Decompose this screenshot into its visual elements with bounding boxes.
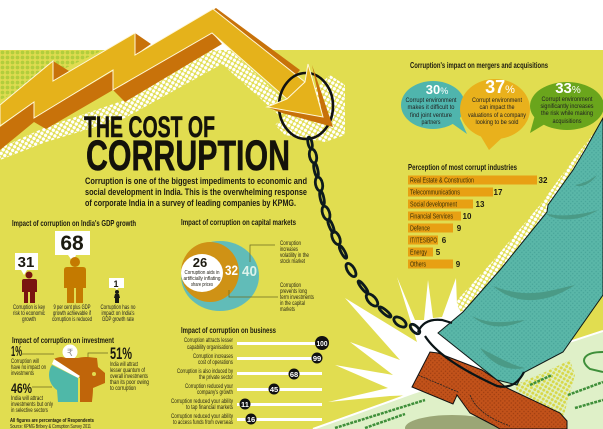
stat: 1%: have no impact on: [11, 365, 46, 371]
lollipop chart: capability organisations: [187, 345, 233, 351]
lollipop chart: to tap financial markets: [186, 405, 233, 411]
dotted green corner: [0, 50, 103, 100]
bar chart: 17: [494, 188, 503, 197]
title: CORRUPTION: [86, 132, 290, 180]
bubble: 33%: Corrupt environment: [542, 96, 593, 103]
lollipop chart: 11: [241, 400, 249, 409]
stat: 51%: overall investments: [110, 374, 148, 380]
intro text: [85, 175, 307, 208]
lollipop chart: cost of operations: [198, 360, 233, 366]
bar chart: 5: [436, 248, 441, 257]
note: long term investments: in the capital: [280, 301, 305, 307]
stat: 51%: [88, 344, 149, 392]
bar chart: Real Estate & Construction: [410, 178, 474, 184]
bar chart: 9: [456, 260, 461, 269]
note: volatility: increases: [280, 247, 298, 253]
figure: 1: Corruption has no: [100, 305, 136, 311]
bubble: 37%: valuations of a company: [468, 112, 527, 119]
lollipop chart: [171, 336, 329, 426]
figure: 68: 68: [60, 232, 84, 255]
stat: 51%: India will attract: [110, 362, 138, 368]
title: [84, 111, 290, 180]
bubble: 33%: acquisitions: [552, 118, 582, 125]
footnote: All figures are percentage of Respondents: [10, 418, 94, 424]
figure: 68: 9 per cent plus GDP: [54, 305, 90, 311]
lollipop chart: Corruption increases: [193, 354, 233, 360]
arrow shaft: [0, 8, 305, 150]
bar chart: 10: [463, 212, 472, 221]
lollipop chart: Corruption is also induced by: [177, 369, 233, 375]
lollipop chart: the private sector: [199, 375, 233, 381]
sock: [438, 340, 482, 370]
figure: 31: 31: [18, 254, 34, 271]
bubble: 37%: looking to be sold: [476, 119, 519, 126]
bar chart: 32: [539, 176, 548, 185]
bubble: 37%: Corrupt environment: [472, 97, 522, 104]
panel: capital markets: [181, 217, 314, 313]
note: volatility: Corruption: [280, 241, 301, 247]
heading: capital markets: Impact of corruption on capital markets: [181, 217, 296, 227]
bubble: 33%: 33%: [555, 80, 581, 97]
starburst: [328, 277, 470, 402]
bar chart: Defence: [410, 226, 430, 232]
figure: 31: growth: [22, 317, 36, 323]
figure: 68: corruption is reduced: [52, 317, 92, 323]
figure: 1: impact on India's: [102, 311, 134, 317]
bubble: 30%: Corrupt environment: [406, 97, 457, 104]
note: volatility: stock market: [280, 259, 305, 265]
lollipop chart: Corruption reduced your ability: [171, 399, 233, 405]
stat: 1%: Corruption will: [11, 359, 39, 365]
panel: business: [171, 325, 329, 426]
lollipop chart: to access funds from overseas: [173, 420, 233, 426]
halftone behind arrow: [0, 42, 292, 160]
footnote: [10, 418, 94, 429]
lollipop chart: 68: [290, 370, 298, 379]
nested circles chart: 40: [242, 263, 257, 280]
note: long term investments: term investments: [280, 295, 314, 301]
heading: business: Impact of corruption on business: [181, 325, 276, 335]
stat: 51%: 51%: [110, 344, 132, 363]
bar chart: [408, 176, 548, 269]
nested circles chart: artificially inflating: [184, 276, 220, 282]
bubble: 37%: 37%: [485, 77, 515, 97]
stat: 46%: investments but only: [11, 402, 53, 408]
stat: 46%: [11, 380, 53, 414]
stat: 51%: to corruption: [110, 386, 136, 392]
panel: GDP growth: [12, 218, 136, 323]
heading: industries: Perception of most corrupt industries: [408, 162, 517, 172]
stat: 46%: India will attract: [11, 396, 43, 402]
nested circles chart: 26: [193, 255, 207, 270]
nested circles chart: 32: [225, 262, 238, 278]
note: long term investments: markets: [280, 307, 295, 313]
ring at arrow tip: [279, 73, 333, 139]
note: volatility: volatility in the: [280, 253, 310, 259]
stat: 51%: than its poor owing: [110, 380, 149, 386]
bar chart: 6: [442, 236, 447, 245]
figure: 68: [52, 231, 92, 323]
lollipop chart: Corruption reduced your: [185, 384, 233, 390]
heading: mergers: Corruption's impact on mergers and acquisitions: [410, 60, 548, 70]
figure: 68: growth achievable if: [53, 311, 91, 317]
bar chart: Energy: [410, 250, 427, 256]
bubble: 37%: [460, 77, 530, 150]
figure: 1: GDP growth rate: [102, 317, 134, 323]
nested circles chart: share prices: [191, 282, 213, 288]
panel: investment: [10, 335, 149, 429]
intro text: social development in India. This is the overwhelming response: [85, 186, 307, 197]
lollipop chart: 45: [270, 385, 278, 394]
shoe: [412, 352, 567, 429]
note: long term investments: [280, 283, 314, 313]
lollipop chart: 99: [313, 354, 321, 363]
note: volatility: [280, 241, 310, 265]
bar chart: IT/ITES/BPO: [410, 238, 437, 244]
heading: investment: Impact of corruption on investment: [12, 335, 114, 345]
lollipop chart: Corruption reduced your ability: [171, 414, 233, 420]
heading: GDP: Impact of corruption on India's GDP growth: [12, 218, 136, 228]
figure: 31: Corruption is key: [13, 305, 45, 311]
nested circles chart: Corruption aids in: [184, 270, 220, 276]
bubble: 30%: 30%: [426, 82, 448, 97]
figure: 31: [13, 253, 45, 323]
figure: 1: [100, 278, 136, 323]
bubble: 30%: makes it difficult to: [408, 104, 455, 111]
bubble: 30%: partners: [422, 119, 440, 126]
stat: 46%: 46%: [11, 380, 32, 396]
panel: corrupt industries: [408, 162, 548, 269]
stat: 1%: 1%: [11, 343, 22, 360]
bubble: 30%: [401, 81, 467, 134]
bubble: 37%: can impact the: [480, 104, 515, 111]
bar chart: 9: [457, 224, 462, 233]
bar chart: 13: [476, 200, 485, 209]
stat: 1%: investments: [11, 371, 34, 377]
stat: 46%: in selective sectors: [11, 408, 48, 414]
stat: 51%: lesser quantum of: [110, 368, 145, 374]
halftone around arrow tip: [275, 75, 345, 142]
figure: 1: 1: [113, 279, 119, 289]
panel: mergers and acquisitions: [401, 60, 603, 150]
halftone behind leg: [452, 135, 596, 318]
bubble: 33%: significantly increases: [540, 103, 594, 110]
note: long term investments: Corruption: [280, 283, 301, 289]
chain: [307, 137, 421, 335]
lollipop chart: 100: [316, 339, 328, 348]
money bill: [313, 331, 603, 429]
lollipop chart: company's growth: [197, 390, 233, 396]
lollipop chart: Corruption attracts lesser: [184, 338, 233, 344]
bar chart: Others: [410, 262, 426, 268]
intro text: of corporate India in a survey of leading companies by KPMG.: [85, 197, 296, 208]
nested circles chart: [181, 241, 259, 311]
bar chart: Social development: [410, 202, 457, 208]
arrow head: [267, 64, 333, 127]
intro text: Corruption is one of the biggest impediments to economic and: [85, 175, 307, 186]
bubble: 33%: the risk while making: [541, 110, 593, 117]
bubble: 33%: [530, 80, 603, 133]
figure: 31: risk to economic: [13, 311, 45, 317]
note: long term investments: prevents long: [280, 289, 307, 295]
title: THE COST OF: [84, 111, 215, 144]
lollipop chart: 16: [247, 415, 255, 424]
bar chart: Financial Services: [410, 214, 453, 220]
leg: [438, 118, 603, 385]
piggy bank: ₹: [67, 348, 73, 359]
bar chart: Telecommunications: [410, 190, 460, 196]
ankle ring: [418, 320, 524, 387]
stat: 1%: [11, 343, 54, 377]
bubble: 30%: find joint venture: [410, 112, 452, 119]
